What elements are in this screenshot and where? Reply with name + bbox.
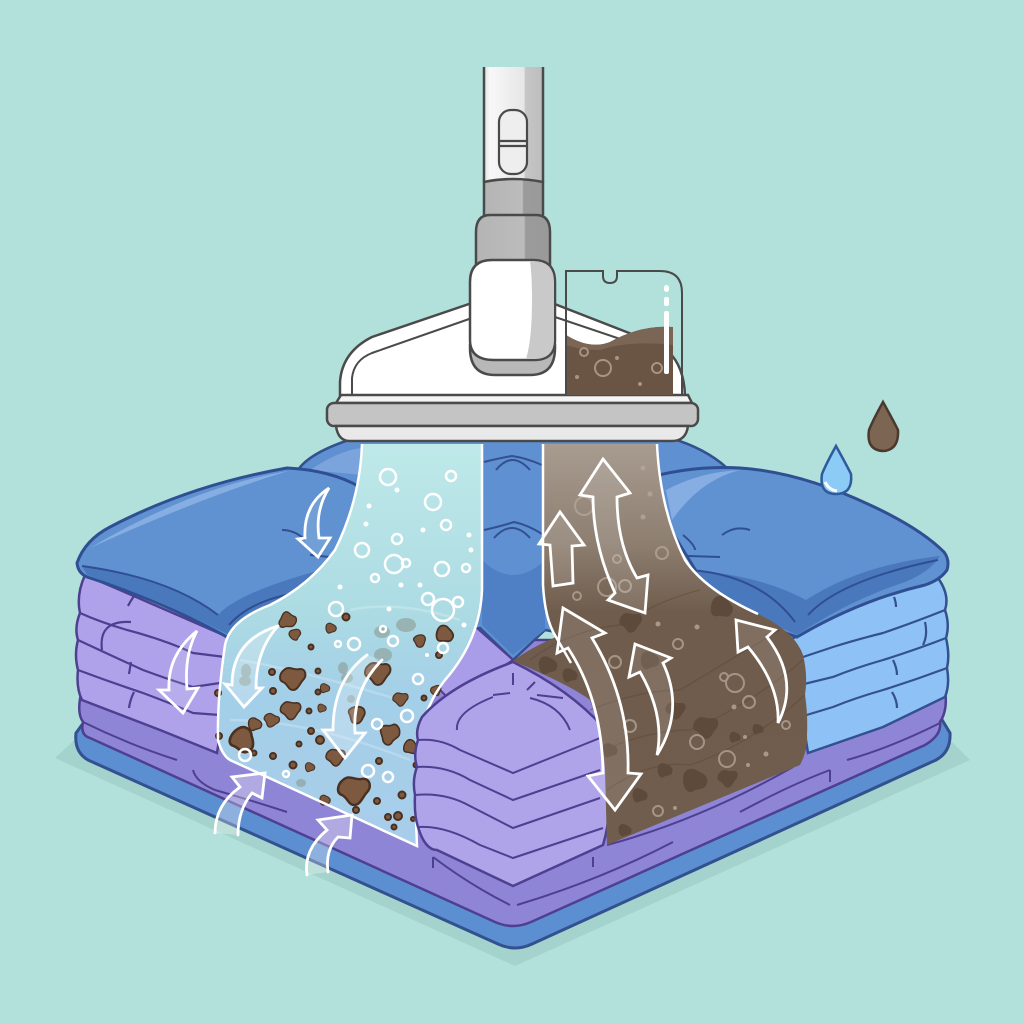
arrow: left stack down [159,631,198,713]
switch [499,110,527,174]
arrow: dirty long double [557,608,641,810]
muted bubbles [573,497,790,816]
centre front towel stack [414,662,609,886]
right blue pillow [640,468,948,637]
tube [484,67,543,182]
arrow: dirty curved up [629,644,673,755]
grey smudges [239,618,416,787]
arrow: dirty small up [539,512,584,586]
arrow: dirty double top [580,459,648,613]
bubbles [239,469,470,782]
right towel stack [790,578,948,753]
water outline [218,444,482,846]
arrow: water centre down [323,655,382,758]
dirty water column [513,444,807,845]
clean water column [215,444,482,846]
nozzle body [327,303,698,441]
arrow: pillow down [298,488,330,557]
left towel stack [76,575,235,753]
collar and joint [476,179,550,270]
flow arrows [159,459,787,875]
blue drop [822,446,851,494]
nozzle head [470,260,555,375]
back blue cushion and centre fill [298,438,730,700]
lower purple layers [79,640,946,926]
arrow: up left one [215,773,265,835]
carpet base layer [76,700,950,948]
arrow: up left two [306,815,352,875]
left blue pillow [77,468,380,637]
dark dirt clumps [539,593,764,837]
layer contours [530,590,805,790]
arrow: water left down [225,626,278,707]
dirt particles [215,610,456,830]
ground shadow [55,735,970,966]
dirty outline [543,444,758,663]
dirt tank [566,271,682,395]
brown drip [869,402,898,451]
arrow: dirty right curved up [736,620,787,723]
